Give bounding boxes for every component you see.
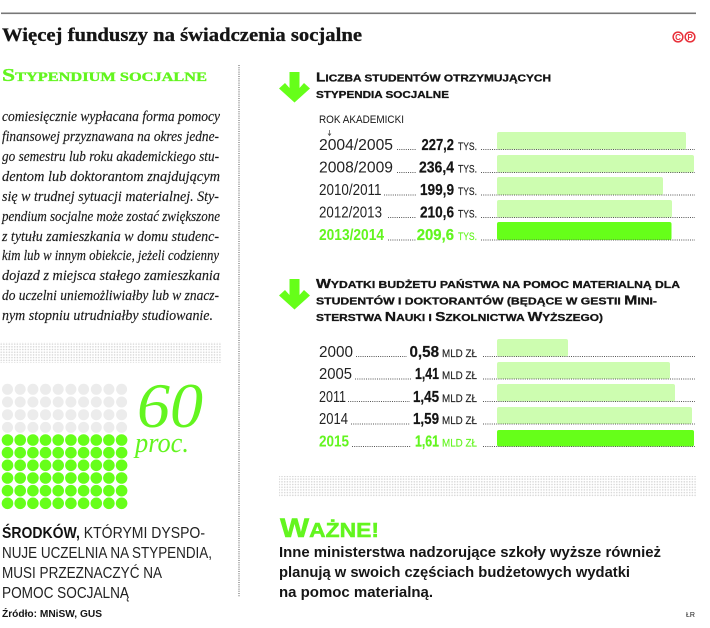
text block: definition: nym stopniu utrudniałby studiowanie. xyxy=(2,308,213,324)
bar row 2012/2013 xyxy=(319,200,695,222)
panel: budget chart xyxy=(279,276,695,450)
text block: definition: dojazd z miejsca stałego zamieszkania xyxy=(2,268,220,284)
source: Źródło: MNiSW, GUS xyxy=(2,607,102,620)
bar row 2008/2009: 236,4 xyxy=(419,160,454,176)
bar row 2014: 2014 xyxy=(319,411,348,428)
bar row 2010/2011: 2010/2011 xyxy=(319,182,382,199)
text block: definition: z tytułu zamieszkania w domu studenc- xyxy=(1,229,219,245)
bar row 2008/2009: 2008/2009 xyxy=(319,160,393,176)
heading: students xyxy=(316,70,551,101)
bar row 2013/2014: 209,6 xyxy=(417,227,454,244)
bar row 2012/2013: 2012/2013 xyxy=(319,204,382,222)
bar row 2004/2005 xyxy=(319,132,695,154)
heading: budget: STUDENTÓW I DOKTORANTÓW (BĘDĄCE W GESTII MINI- xyxy=(316,292,657,308)
bar row 2011: 2011 xyxy=(319,389,346,406)
caption xyxy=(2,524,212,602)
bar row 2005: MLD ZŁ xyxy=(442,370,477,382)
bar row 2011 xyxy=(319,384,695,406)
bar row 2008/2009: TYS. xyxy=(458,164,477,176)
bar row 2012/2013: 210,6 xyxy=(420,204,454,222)
bar row 2004/2005: 227,2 xyxy=(422,137,454,154)
bar row 2010/2011 xyxy=(319,177,695,199)
bar row 2000: MLD ZŁ xyxy=(442,348,477,360)
bar row 2005: 2005 xyxy=(319,366,352,383)
heading: Stypendium socjalne: STYPENDIUM SOCJALNE xyxy=(2,65,207,85)
bar row 2014: 1,59 xyxy=(413,411,439,428)
big number: 60: 60 xyxy=(137,370,203,441)
icon: publisher logo: C xyxy=(675,33,681,42)
text block: callout: planują w swoich częściach budżetowych wydatki xyxy=(279,564,630,581)
bar row 2005: 1,41 xyxy=(415,366,439,383)
title: Więcej funduszy na świadczenia socjalne xyxy=(2,25,362,46)
heading: Ważne!: WAŻNE! xyxy=(280,513,379,543)
bar row 2004/2005: TYS. xyxy=(458,141,477,153)
text block: definition: kim lub w innym obiekcie, jeżeli codzienny xyxy=(2,248,219,264)
text block: definition: comiesięcznie wypłacana forma pomocy xyxy=(2,109,221,125)
bar row 2014 xyxy=(319,407,695,428)
bar row 2011: 1,45 xyxy=(413,389,439,406)
bar row 2015 xyxy=(319,430,695,450)
bar row 2010/2011: TYS. xyxy=(458,186,477,198)
icon: small arrow xyxy=(328,130,331,136)
caption: ŚRODKÓW, KTÓRYMI DYSPO- xyxy=(2,524,205,542)
bar row 2000: 2000 xyxy=(319,344,353,361)
bar row 2015: MLD ZŁ xyxy=(442,438,477,450)
bar row 2004/2005: 2004/2005 xyxy=(319,137,393,154)
text block: definition: do uczelni uniemożliwiałby lub w znacz- xyxy=(2,288,219,304)
caption: NUJE UCZELNIA NA STYPENDIA, xyxy=(2,545,212,562)
heading: budget: STERSTWA NAUKI I SZKOLNICTWA WYŻSZEGO) xyxy=(316,309,603,324)
icon: down arrow xyxy=(279,279,310,310)
bar row 2014: MLD ZŁ xyxy=(442,415,477,427)
panel: 60 percent xyxy=(2,370,212,602)
axis label: ROK AKADEMICKI xyxy=(319,114,404,126)
heading: students: STYPENDIA SOCJALNE xyxy=(316,90,449,101)
unit: proc.: proc. xyxy=(133,428,189,459)
caption: MUSI PRZEZNACZYĆ NA xyxy=(2,565,163,582)
chart: dot matrix xyxy=(2,384,127,509)
bar row 2013/2014: TYS. xyxy=(458,231,477,243)
panel: Ważne callout xyxy=(279,513,661,601)
bar row 2015: 1,61 xyxy=(415,434,439,450)
bar row 2012/2013: TYS. xyxy=(458,208,477,220)
bar row 2011: MLD ZŁ xyxy=(442,393,477,405)
bar row 2000: 0,58 xyxy=(410,344,439,361)
bar row 2000 xyxy=(319,339,695,361)
text block: definition: dentom lub doktorantom znajdującym xyxy=(2,169,220,185)
caption: POMOC SOCJALNĄ xyxy=(2,585,130,602)
bar row 2005 xyxy=(319,362,695,383)
text block: callout xyxy=(279,544,661,601)
text block: callout: Inne ministerstwa nadzorujące szkoły wyższe również xyxy=(279,544,661,561)
text block: definition: finansowej przyznawana na okres jedne- xyxy=(2,129,219,145)
heading: budget xyxy=(316,276,680,324)
heading: budget: W YDATKI BUDŻETU PAŃSTWA NA POMOC MATERIALNĄ DLA xyxy=(316,276,680,291)
bar row 2008/2009 xyxy=(319,155,695,176)
heading: students: LICZBA STUDENTÓW OTRZYMUJĄCYCH xyxy=(316,70,551,84)
bar row 2010/2011: 199,9 xyxy=(420,182,454,199)
text block: definition: go semestru lub roku akademickiego stu- xyxy=(2,149,219,165)
text block: definition: pendium socjalne może zostać zwiększone xyxy=(1,209,220,225)
panel: definition xyxy=(1,65,221,324)
bar row 2013/2014 xyxy=(319,222,695,244)
icon: down arrow xyxy=(279,72,310,102)
panel: students chart xyxy=(279,70,695,244)
bar row 2013/2014: 2013/2014 xyxy=(319,227,384,244)
text block: callout: na pomoc materialną. xyxy=(279,584,433,601)
icon: publisher logo xyxy=(672,31,696,43)
bar row 2015: 2015 xyxy=(319,434,349,450)
text block: definition xyxy=(1,109,221,324)
icon: publisher logo: P xyxy=(687,33,693,42)
text block: definition: się w trudnej sytuacji materialnej. Sty- xyxy=(2,189,219,205)
author initials: ŁR xyxy=(686,610,696,619)
